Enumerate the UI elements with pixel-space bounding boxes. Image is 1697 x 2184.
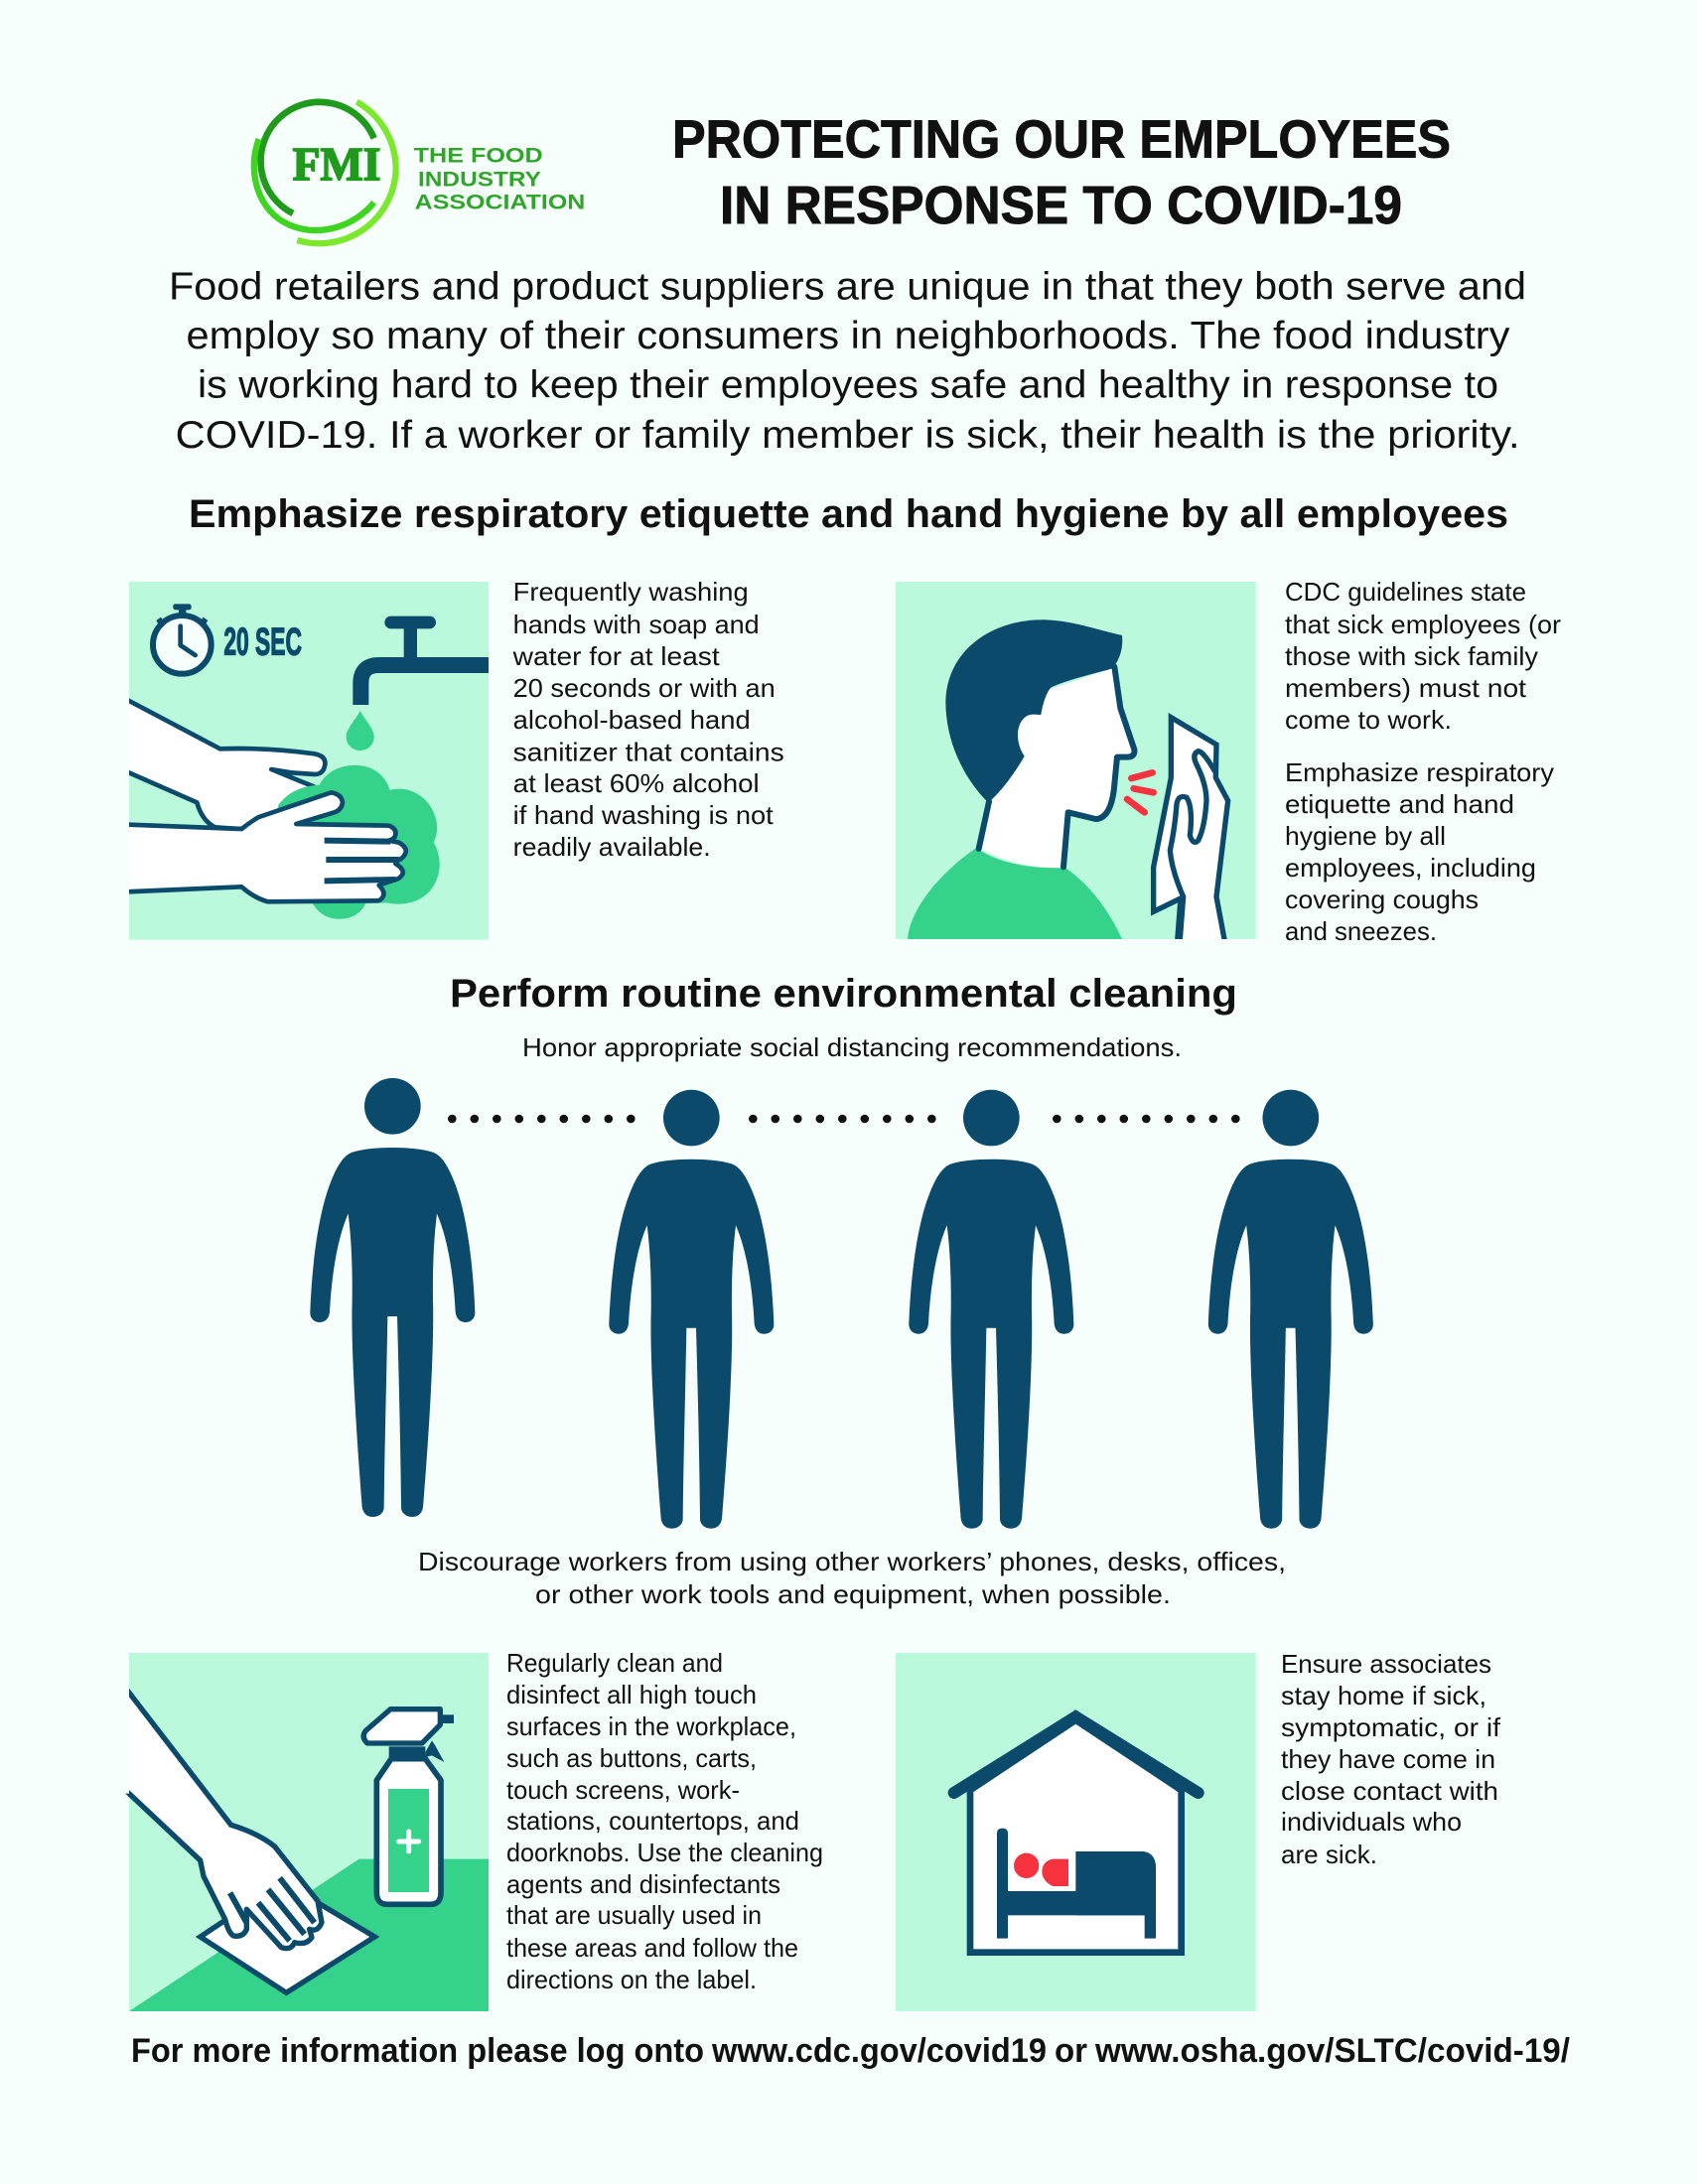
text: regular cleaning: agents and disinfectants <box>506 1869 780 1899</box>
text: stay home: symptomatic, or if <box>1281 1712 1501 1742</box>
icon: water drop <box>347 711 374 751</box>
text: discourage sharing: or other work tools and equipment, when possible. <box>535 1579 1171 1609</box>
dotted spacing 2 <box>749 1115 936 1123</box>
cloth <box>201 1903 374 1992</box>
logo tagline: INDUSTRY <box>418 168 541 191</box>
text: CDC guidelines: employees, including <box>1285 853 1536 883</box>
text: regular cleaning: that are usually used in <box>506 1900 762 1930</box>
bed <box>997 1829 1156 1939</box>
text: stay home: they have come in <box>1281 1744 1495 1774</box>
text: regular cleaning: disinfect all high touch <box>506 1680 757 1709</box>
text: hand washing: hands with soap and <box>513 610 760 639</box>
soap foam <box>278 765 440 919</box>
text: stay home: individuals who <box>1281 1807 1462 1837</box>
panel: coughing into tissue illustration <box>896 582 1256 959</box>
footer: more information: or <box>1055 2032 1087 2070</box>
tissue and hand <box>1154 718 1228 950</box>
text: hand washing: 20 seconds or with an <box>513 673 776 703</box>
roof <box>954 1716 1199 1793</box>
sick person <box>1014 1853 1068 1886</box>
heading: respiratory etiquette: Emphasize respiratory etiquette and hand hygiene by all employees <box>189 492 1508 536</box>
logo tagline <box>414 144 585 214</box>
text: CDC guidelines: those with sick family <box>1285 641 1538 671</box>
text: CDC guidelines <box>1285 577 1561 946</box>
text: stay home <box>1281 1649 1501 1869</box>
hair <box>945 619 1122 802</box>
text: CDC guidelines: etiquette and hand <box>1285 789 1514 819</box>
title: PROTECTING OUR EMPLOYEES <box>672 109 1451 169</box>
house <box>970 1720 1182 1953</box>
icon: spray bottle <box>363 1709 454 1904</box>
title: IN RESPONSE TO COVID-19 <box>720 176 1402 235</box>
intro paragraph: COVID-19. If a worker or family member is sick, their health is the priority. <box>176 414 1520 457</box>
text: stay home: Ensure associates <box>1281 1649 1491 1679</box>
text: stay home: stay home if sick, <box>1281 1681 1486 1710</box>
text: discourage sharing <box>418 1547 1286 1609</box>
upper hand <box>119 696 325 831</box>
panel: hand washing illustration <box>112 582 489 940</box>
heading: environmental cleaning: Perform routine environmental cleaning <box>450 972 1237 1016</box>
text: hand washing: if hand washing is not <box>513 800 775 830</box>
text: regular cleaning: stations, countertops, and <box>506 1806 799 1836</box>
cough marks <box>1127 772 1154 812</box>
text: CDC guidelines: members) must not <box>1285 673 1527 703</box>
face and neck <box>980 668 1136 868</box>
dotted spacing 1 <box>448 1115 636 1123</box>
title <box>672 109 1451 235</box>
footer: more information: For more information please log onto <box>131 2032 704 2070</box>
text: CDC guidelines: Emphasize respiratory <box>1285 757 1554 787</box>
lower hand <box>119 792 406 901</box>
text: hand washing: water for at least <box>512 641 721 671</box>
panel: stay home illustration <box>896 1653 1256 2011</box>
face outline <box>979 667 1134 867</box>
text: hand washing: Frequently washing <box>513 577 749 607</box>
text: hand washing <box>512 577 784 862</box>
text: regular cleaning: surfaces in the workplace, <box>506 1711 796 1741</box>
panel: cleaning surfaces illustration <box>112 1653 489 2011</box>
text: regular cleaning: doorknobs. Use the cleaning <box>506 1838 823 1867</box>
text: CDC guidelines: and sneezes. <box>1285 916 1437 946</box>
dotted spacing 3 <box>1053 1115 1240 1123</box>
text: regular cleaning: directions on the label. <box>506 1965 757 1994</box>
text: hand washing: sanitizer that contains <box>513 738 784 767</box>
social distancing figures <box>310 1078 1373 1529</box>
logo tagline: THE FOOD <box>414 144 543 167</box>
logo wordmark: FMI <box>293 139 380 192</box>
text: CDC guidelines: hygiene by all <box>1285 821 1446 851</box>
logo tagline: ASSOCIATION <box>415 192 585 214</box>
text: stay home: close contact with <box>1281 1776 1498 1806</box>
text: CDC guidelines: come to work. <box>1285 705 1452 735</box>
person 4 <box>1208 1090 1373 1529</box>
person 2 <box>609 1090 774 1529</box>
text: hand washing: alcohol-based hand <box>513 705 751 735</box>
text: regular cleaning <box>506 1648 823 1994</box>
text: CDC guidelines: that sick employees (or <box>1285 610 1561 639</box>
icon: faucet <box>360 616 489 705</box>
person 3 <box>909 1090 1073 1529</box>
table surface <box>129 1859 489 2011</box>
person 1 <box>310 1078 475 1517</box>
text: regular cleaning: Regularly clean and <box>506 1648 723 1678</box>
label: 20 sec: 20 SEC <box>223 620 302 663</box>
logo: FMI The Food Industry Association <box>254 102 585 243</box>
text: regular cleaning: such as buttons, carts, <box>506 1743 757 1773</box>
text: regular cleaning: touch screens, work- <box>506 1775 740 1805</box>
intro paragraph: employ so many of their consumers in neighborhoods. The food industry <box>187 315 1510 357</box>
shirt <box>908 848 1122 939</box>
intro paragraph: Food retailers and product suppliers are unique in that they both serve and <box>169 266 1526 309</box>
text: CDC guidelines: covering coughs <box>1285 885 1479 914</box>
footer: more information: www.cdc.gov/covid19 <box>711 2032 1047 2070</box>
footer: more information: www.osha.gov/SLTC/covid-19/ <box>1094 2032 1570 2070</box>
text: hand washing: at least 60% alcohol <box>513 768 760 798</box>
icon: stopwatch <box>153 604 212 674</box>
text: stay home: are sick. <box>1281 1840 1377 1869</box>
logo rings <box>254 102 396 243</box>
footer: more information <box>131 2032 1570 2070</box>
intro paragraph: is working hard to keep their employees safe and healthy in response to <box>198 364 1498 407</box>
intro paragraph <box>169 266 1526 457</box>
text: hand washing: readily available. <box>513 832 711 862</box>
text: discourage sharing: Discourage workers from using other workers’ phones, desks, offices, <box>418 1547 1286 1576</box>
text: CDC guidelines: CDC guidelines state <box>1285 577 1526 607</box>
hand <box>119 1680 322 1949</box>
text: regular cleaning: these areas and follow the <box>506 1933 798 1963</box>
text: social distancing: Honor appropriate social distancing recommendations. <box>522 1032 1182 1062</box>
